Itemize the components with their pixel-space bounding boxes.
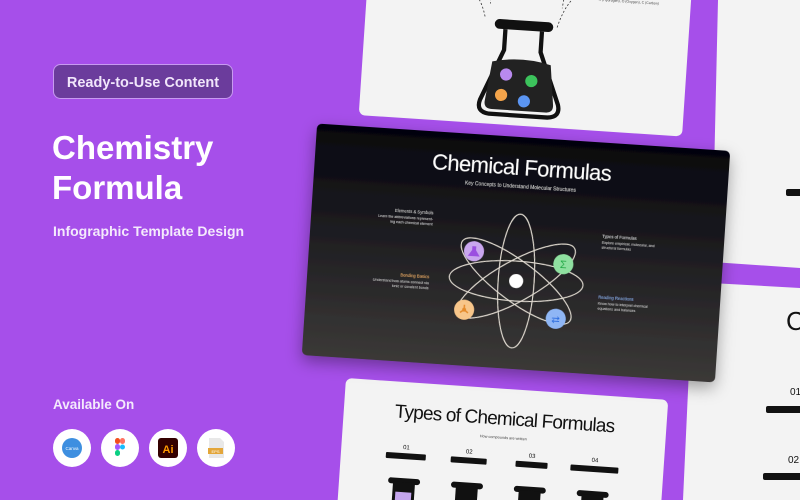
text: right card labels xyxy=(763,189,800,480)
panel: types of chemical formulas slide xyxy=(336,378,668,500)
text: reading reactions: Reading Reactions xyxy=(598,295,634,302)
panel: top flask slide xyxy=(359,0,696,137)
text: right card labels: 02 xyxy=(788,455,800,466)
icon: molecule orange xyxy=(453,299,475,320)
icon: sigma green: Σ xyxy=(560,259,567,271)
subtitle: Infographic Template Design xyxy=(53,223,244,239)
steps: 01 xyxy=(403,445,411,452)
steps: 04 xyxy=(591,458,599,464)
badge: Ready-to-Use Content xyxy=(54,64,232,98)
text: elements & symbols xyxy=(378,207,434,226)
text: types of formulas xyxy=(601,234,655,253)
icon: illustrator: Ai xyxy=(162,444,174,456)
icon: canva: Canva xyxy=(65,446,79,451)
icon: flask xyxy=(478,18,564,118)
text: elements & symbols: ing each chemical element xyxy=(390,220,433,226)
icon: illustrator xyxy=(149,429,187,467)
text: bonding basics: Understand how atoms connect via xyxy=(373,278,429,285)
icon: sigma green xyxy=(553,254,574,275)
icon: eps: EPS xyxy=(211,449,220,454)
text: elements & symbols: Learn the abbreviations represent- xyxy=(378,214,434,221)
icon: canva xyxy=(53,429,91,467)
title: Chemistry Formula: Formula xyxy=(52,169,183,206)
text: reading reactions: Know how to interpret chemical xyxy=(598,302,648,309)
chart: atom xyxy=(445,210,588,352)
text: subtitle: How compounds are written xyxy=(480,434,527,441)
steps: 02 xyxy=(466,449,473,456)
text: reading reactions: equations and balances xyxy=(597,307,636,313)
title: Chemistry Formula: Chemistry xyxy=(52,129,214,166)
text: bonding basics xyxy=(372,271,430,290)
text: types of formulas: Types of Formulas xyxy=(602,234,637,241)
text: subtitle: Key Concepts to Understand Molecular Structures xyxy=(465,180,577,194)
badge: Ready-to-Use Content: Ready-to-Use Content xyxy=(67,75,219,91)
steps: 03 xyxy=(529,454,536,460)
icon: arrows blue: ⇄ xyxy=(551,315,560,326)
text: types of formulas: structural formulas xyxy=(601,246,631,252)
icons: software xyxy=(53,429,235,467)
heading: Available On: Available On xyxy=(53,397,134,412)
text: reading reactions xyxy=(597,295,648,314)
panel: dark main slide xyxy=(302,124,730,382)
panel: right bottom card xyxy=(683,189,800,500)
heading: Chemical Formulas: Chemical Formulas xyxy=(431,149,613,186)
text: bonding basics: Bonding Basics xyxy=(400,272,429,279)
icon: arrows blue xyxy=(545,308,566,329)
panel: right top card xyxy=(712,0,800,268)
text: elements & symbols: Elements & Symbols xyxy=(395,208,434,215)
icon: flask purple xyxy=(463,241,485,262)
icon: figma xyxy=(101,429,139,467)
heading: Types of Chemical Formulas: Types of Chemical Formulas xyxy=(394,401,615,437)
text: bonding basics: ionic or covalent bonds xyxy=(392,284,429,290)
steps xyxy=(381,444,619,500)
icon: eps xyxy=(197,429,235,467)
text: types of formulas: Explore empirical, molecular, and xyxy=(602,241,655,248)
title: Chemistry Formula xyxy=(52,129,214,206)
